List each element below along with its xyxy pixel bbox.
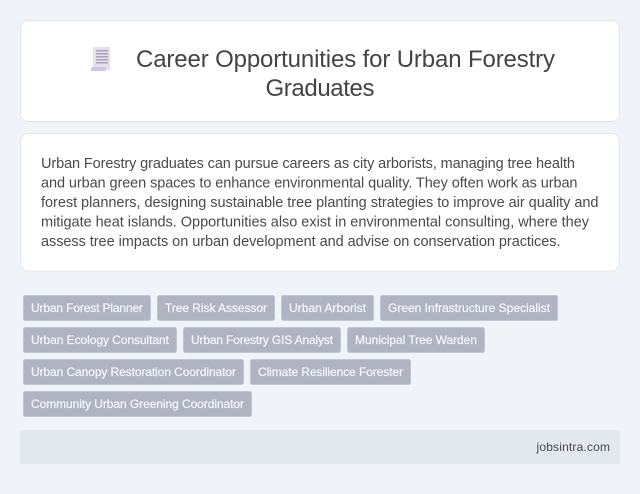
text block: description: forest planners, designing sustainable tree planting strategies to improve air quality and: [41, 195, 598, 211]
title: [136, 46, 555, 102]
tag: Municipal Tree Warden: [348, 328, 484, 352]
text block: description: [41, 156, 598, 250]
tag: Climate Resilience Forester: [250, 360, 410, 384]
tag: Urban Forestry GIS Analyst: Urban Forestry GIS Analyst: [191, 333, 334, 347]
footer: [20, 430, 620, 464]
tag: Green Infrastructure Specialist: [380, 296, 558, 320]
tag: Green Infrastructure Specialist: Green Infrastructure Specialist: [388, 301, 551, 315]
footer text: jobsintra.com: [536, 440, 610, 454]
panel: description: [20, 134, 620, 271]
panel: header: [20, 20, 620, 122]
text block: description: mitigate heat islands. Opportunities also exist in environmental consulting, where they: [41, 214, 590, 230]
tag: Urban Ecology Consultant: [24, 328, 176, 352]
icon: document scroll: [91, 47, 110, 71]
tag: Urban Forest Planner: [24, 296, 150, 320]
tag: Community Urban Greening Coordinator: [24, 392, 252, 416]
text block: description: and urban green spaces to enhance environmental quality. They often work as urban: [41, 176, 578, 192]
tag: Municipal Tree Warden: Municipal Tree Warden: [355, 333, 477, 347]
title: Graduates: [266, 75, 374, 102]
tag: Urban Arborist: Urban Arborist: [289, 301, 367, 315]
tags: career roles: [24, 296, 558, 416]
tag: Tree Risk Assessor: Tree Risk Assessor: [165, 301, 267, 315]
tag: Urban Forest Planner: Urban Forest Planner: [31, 301, 143, 315]
tag: Urban Forestry GIS Analyst: [184, 328, 340, 352]
tag: Urban Ecology Consultant: Urban Ecology Consultant: [31, 333, 170, 347]
text block: description: assess tree impacts on urban development and advise on conservation practices.: [41, 234, 560, 250]
text block: description: Urban Forestry graduates can pursue careers as city arborists, managing tree health: [41, 156, 575, 172]
tag: Climate Resilience Forester: Climate Resilience Forester: [258, 365, 403, 379]
tag: Urban Canopy Restoration Coordinator: [24, 360, 244, 384]
title: Career Opportunities for Urban Forestry: [136, 46, 555, 73]
tag: Tree Risk Assessor: [158, 296, 274, 320]
tag: Urban Canopy Restoration Coordinator: Urban Canopy Restoration Coordinator: [31, 365, 236, 379]
tag: Community Urban Greening Coordinator: Community Urban Greening Coordinator: [31, 397, 244, 411]
tag: Urban Arborist: [282, 296, 374, 320]
